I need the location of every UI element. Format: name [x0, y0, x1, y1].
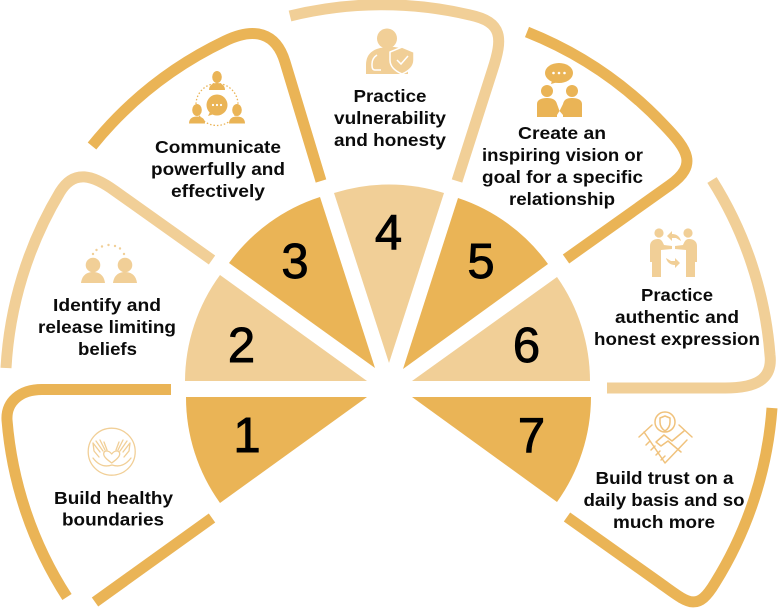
outline 2: [6, 177, 212, 368]
label 3: powerfully and: [151, 159, 285, 179]
label 2: Identify and: [53, 295, 161, 315]
outline 1: [7, 390, 212, 602]
label 7: Build trust on a: [596, 468, 734, 488]
icon: person with shield: [366, 28, 414, 74]
label 6: authentic and: [615, 307, 739, 327]
wedge 3: [229, 197, 375, 368]
number 7: 7: [518, 409, 545, 463]
label 6: [594, 285, 760, 349]
label 2: release limiting: [38, 317, 176, 337]
wedge 4: [334, 184, 444, 363]
number 4: 4: [375, 206, 402, 260]
label 6: Practice: [641, 285, 713, 305]
wedge 2: [185, 275, 367, 381]
label 1: Build healthy: [54, 488, 173, 508]
panel 4: practice vulnerability and honesty: [290, 5, 499, 363]
label 5: Create an: [518, 123, 606, 143]
panel 5: create an inspiring vision: [403, 32, 687, 369]
number 2: 2: [228, 319, 255, 373]
label 7: [584, 468, 744, 532]
number 6: 6: [513, 319, 540, 373]
label 5: relationship: [509, 189, 615, 209]
wedge 1: [186, 397, 367, 503]
label 7: much more: [613, 512, 715, 532]
icon: hands holding heart: [88, 428, 135, 475]
panel 2: identify and release limiting beliefs: [6, 177, 367, 381]
icon: group communication: [189, 71, 245, 126]
number 5: 5: [467, 235, 495, 289]
label 4: vulnerability: [334, 108, 446, 128]
label 4: and honesty: [334, 130, 446, 150]
number 3: 3: [281, 235, 309, 289]
label 6: honest expression: [594, 329, 760, 349]
label 2: [38, 295, 176, 359]
label 5: [482, 123, 643, 209]
icon: handshake with shield: [639, 412, 692, 463]
label 3: [151, 137, 285, 201]
label 5: inspiring vision or: [482, 145, 643, 165]
panel 1: build healthy boundaries: [7, 390, 367, 602]
outline 3: [92, 34, 321, 181]
number 1: 1: [233, 409, 261, 463]
label 2: beliefs: [78, 339, 137, 359]
icon: two people talking: [537, 63, 582, 117]
panel 7: build trust on a daily basis: [412, 397, 772, 602]
wedge 5: [403, 198, 548, 369]
icon: two people with dotted arc: [81, 244, 137, 283]
outline 7: [567, 408, 772, 602]
label 5: goal for a specific: [482, 167, 643, 187]
label 1: boundaries: [62, 510, 164, 530]
outline 4: [290, 5, 499, 181]
outline 5: [527, 32, 687, 259]
outline 6: [607, 180, 770, 388]
wedge 6: [412, 277, 590, 381]
label 3: Communicate: [155, 137, 281, 157]
wedge 7: [412, 397, 591, 502]
label 7: daily basis and so: [584, 490, 744, 510]
panel 6: practice authentic and honest expression: [412, 180, 770, 388]
label 4: [334, 86, 446, 150]
panel 3: communicate powerfully and effectively: [92, 34, 375, 368]
label 4: Practice: [354, 86, 427, 106]
label 1: [54, 488, 173, 530]
label 3: effectively: [171, 181, 265, 201]
icon: two people exchanging: [650, 228, 697, 277]
